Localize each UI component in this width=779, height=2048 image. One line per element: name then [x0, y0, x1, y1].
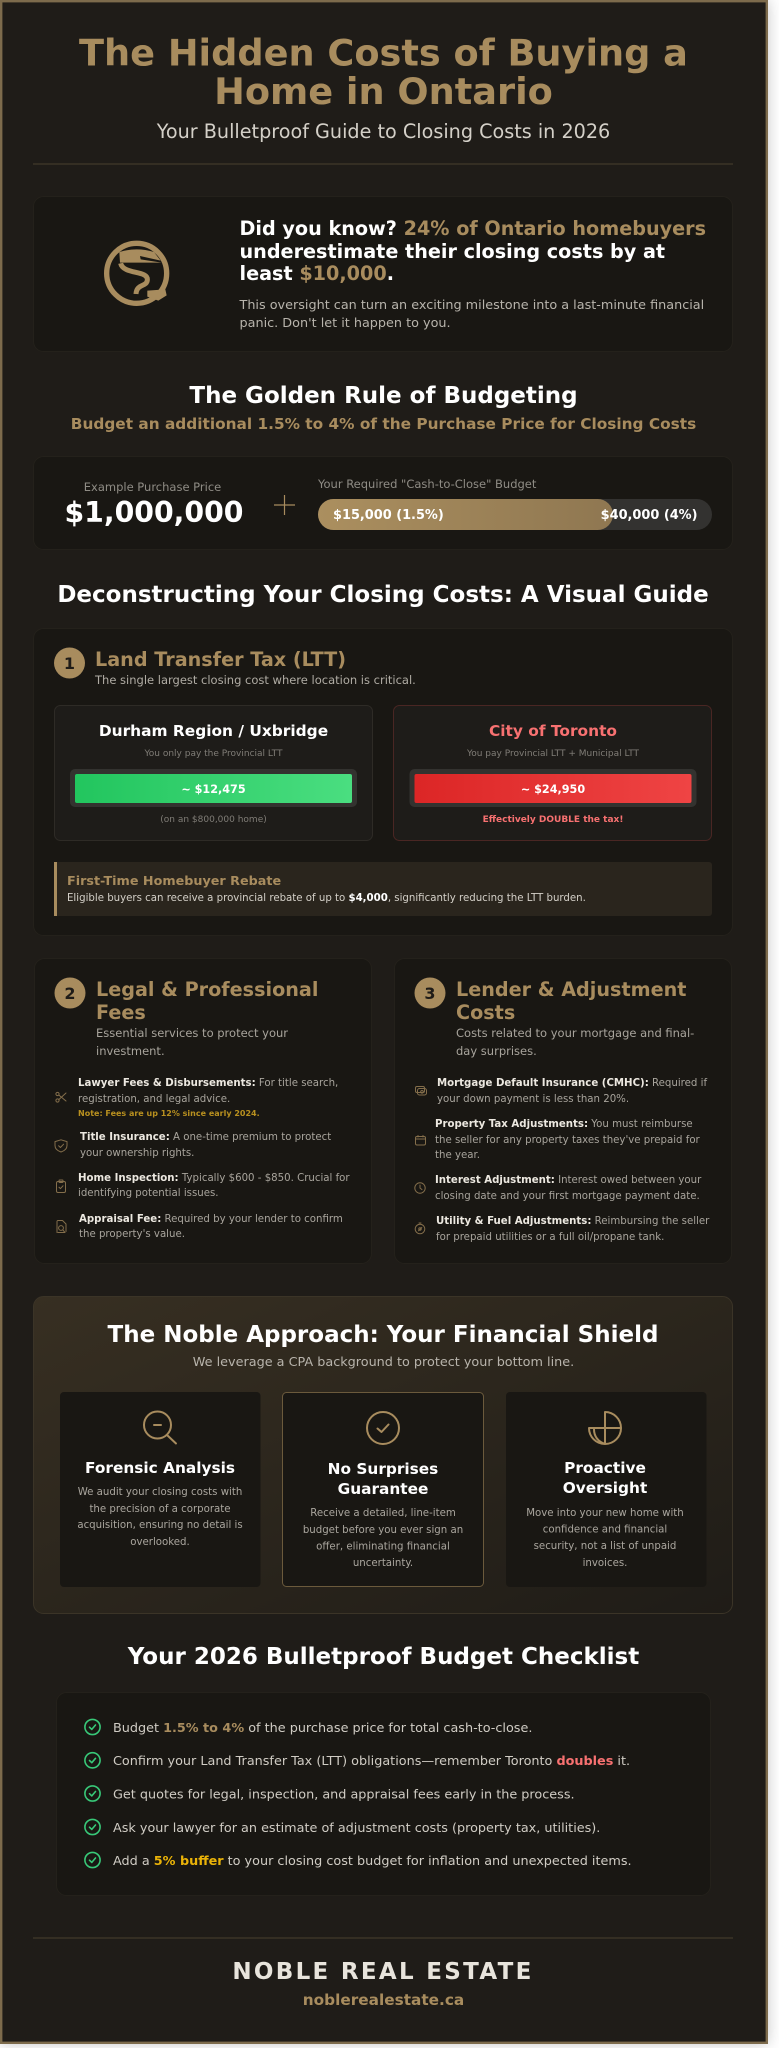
stat headline: Did you know? 24% of Ontario homebuyers	[240, 217, 706, 240]
panel: did you know callout	[34, 196, 732, 352]
badge 3: 3	[424, 984, 436, 1003]
card: proactive oversight: confidence and financial	[543, 1524, 667, 1536]
card: forensic analysis: the precision of a corporate	[89, 1504, 231, 1515]
item: interest adjustment	[435, 1175, 702, 1202]
item: mortgage default insurance	[437, 1078, 707, 1105]
card: Durham	[54, 706, 372, 840]
card: Durham: Durham Region / Uxbridge	[99, 722, 328, 740]
stat headline: underestimate their closing costs by at	[240, 240, 665, 263]
card: no surprises guarantee: uncertainty.	[353, 1558, 413, 1569]
card: forensic analysis: overlooked.	[130, 1537, 190, 1548]
item: lawyer fees: registration, and legal advice.	[78, 1094, 230, 1105]
panel: land transfer tax	[34, 628, 732, 936]
badge 2: 2	[64, 984, 76, 1003]
card: proactive oversight: security, not a list of unpaid	[534, 1541, 676, 1552]
item: appraisal fee: the property's value.	[79, 1229, 185, 1240]
item: utility and fuel	[436, 1216, 710, 1243]
plus sign	[274, 495, 295, 515]
rebate callout: First-Time Homebuyer Rebate	[67, 874, 281, 889]
item: interest adjustment: closing date and your first mortgage payment date.	[435, 1191, 700, 1202]
title: The Hidden Costs of Buying a	[79, 32, 688, 74]
panel: legal and professional fees	[34, 958, 372, 1264]
budget range bar: $40,000 (4%)	[601, 508, 698, 523]
purchase price amount: $1,000,000	[64, 496, 244, 529]
item: home inspection: Home Inspection: Typically $600 - $850. Crucial for	[78, 1173, 350, 1184]
panel: noble approach	[34, 1296, 732, 1614]
footer website: noblerealestate.ca	[303, 1991, 464, 2009]
icon: file search	[57, 1220, 66, 1232]
card: Toronto: ~ $24,950	[521, 783, 585, 796]
icon: magnifier	[144, 1412, 176, 1444]
section title: Fees	[96, 1001, 146, 1024]
item: mortgage default insurance: Mortgage Default Insurance (CMHC): Required if	[437, 1078, 707, 1089]
icon: check circle	[367, 1412, 399, 1444]
title: Home in Ontario	[214, 70, 553, 113]
item: title insurance: your ownership rights.	[80, 1148, 194, 1159]
item: lawyer fees	[78, 1078, 338, 1118]
section description	[96, 1026, 288, 1058]
icon: scissors	[56, 1092, 66, 1102]
rebate callout: Eligible buyers can receive a provincial rebate of up to $4,000, significantly reducing the LTT burden.	[67, 893, 586, 904]
heading: visual guide: Deconstructing Your Closing Costs: A Visual Guide	[57, 582, 709, 608]
card: proactive oversight: Move into your new home with	[526, 1508, 684, 1519]
item: mortgage default insurance: your down payment is less than 20%.	[437, 1094, 629, 1105]
item: utility and fuel: for prepaid utilities or a full oil/propane tank.	[436, 1232, 664, 1243]
card: proactive oversight: Proactive	[564, 1459, 646, 1477]
item: interest adjustment: Interest Adjustment: Interest owed between your	[435, 1175, 702, 1186]
section title	[96, 978, 318, 1024]
item: appraisal fee: Appraisal Fee: Required by your lender to confirm	[79, 1214, 343, 1225]
badge 1: 1	[64, 654, 75, 673]
card: Toronto: Effectively DOUBLE the tax!	[483, 815, 623, 825]
heading: golden rule: The Golden Rule of Budgeting	[189, 383, 578, 409]
stat headline	[240, 217, 706, 285]
icon: shield	[55, 1140, 67, 1152]
card: Toronto	[394, 706, 712, 840]
card: no surprises guarantee: Guarantee	[338, 1480, 428, 1498]
card: forensic analysis: Forensic Analysis	[85, 1459, 235, 1477]
card: no surprises guarantee: Receive a detailed, line-item	[310, 1508, 456, 1519]
card: Durham: (on an $800,000 home)	[160, 815, 267, 825]
callout body: panic. Don't let it happen to you.	[240, 316, 451, 331]
heading: checklist: Your 2026 Bulletproof Budget Checklist	[127, 1644, 639, 1670]
section description: Essential services to protect your	[96, 1026, 288, 1040]
item: lawyer fees: Note: Fees are up 12% since early 2024.	[78, 1109, 260, 1118]
item: appraisal fee	[79, 1214, 343, 1240]
icon: banknotes	[416, 1086, 426, 1095]
item: utility and fuel: Utility & Fuel Adjustments: Reimbursing the seller	[436, 1216, 710, 1227]
card: forensic analysis: We audit your closing costs with	[78, 1487, 242, 1498]
card: Toronto: You pay Provincial LTT + Municipal LTT	[466, 749, 640, 759]
card: proactive oversight: Oversight	[563, 1479, 647, 1497]
item: home inspection: identifying potential issues.	[78, 1188, 219, 1199]
item: lawyer fees: Lawyer Fees & Disbursements: For title search,	[78, 1078, 338, 1089]
section description: day surprises.	[456, 1044, 537, 1058]
card: no surprises guarantee: offer, eliminating financial	[316, 1542, 450, 1552]
card: proactive oversight: invoices.	[583, 1558, 627, 1569]
callout body	[238, 298, 704, 331]
checklist item 1: Budget 1.5% to 4% of the purchase price for total cash-to-close.	[113, 1721, 532, 1736]
card: no surprises guarantee: budget before you ever sign an	[303, 1525, 463, 1536]
card: proactive oversight	[506, 1392, 706, 1587]
stat headline: least $10,000.	[240, 262, 394, 285]
card: forensic analysis	[60, 1392, 260, 1587]
budget label: Your Required "Cash-to-Close" Budget	[317, 477, 537, 491]
section title	[456, 978, 686, 1024]
item: title insurance	[80, 1132, 331, 1159]
checklist item 4: Ask your lawyer for an estimate of adjustment costs (property tax, utilities).	[113, 1821, 600, 1836]
section description: The single largest closing cost where location is critical.	[94, 673, 416, 687]
icon: globe with dollar swirl	[107, 243, 167, 303]
footer brand: NOBLE REAL ESTATE	[232, 1959, 534, 1985]
badge 1	[54, 648, 85, 678]
icon: clipboard	[56, 1180, 66, 1192]
item: title insurance: Title Insurance: A one-time premium to protect	[80, 1132, 331, 1143]
item: property tax adjustments: Property Tax Adjustments: You must reimburse	[435, 1119, 693, 1130]
icon: clock	[415, 1183, 425, 1193]
checklist item 5: Add a 5% buffer to your closing cost budget for inflation and unexpected items.	[113, 1854, 632, 1869]
section title: Land Transfer Tax (LTT)	[95, 648, 346, 671]
checklist item 2: Confirm your Land Transfer Tax (LTT) obligations—remember Toronto doubles it.	[113, 1754, 630, 1769]
rebate callout	[54, 862, 712, 916]
item: property tax adjustments: the seller for any property taxes they've prepaid for	[435, 1135, 701, 1146]
callout body: This oversight can turn an exciting milestone into a last-minute financial	[238, 298, 704, 313]
section description: investment.	[96, 1044, 165, 1058]
panel: cash to close	[34, 456, 732, 550]
golden rule subheading: Budget an additional 1.5% to 4% of the Purchase Price for Closing Costs	[71, 415, 696, 433]
card: no surprises guarantee: No Surprises	[328, 1460, 438, 1478]
panel heading: The Noble Approach: Your Financial Shield	[108, 1322, 658, 1348]
card: Durham: ~ $12,475	[181, 783, 246, 796]
item: home inspection	[78, 1173, 350, 1199]
budget range bar: $15,000 (1.5%)	[333, 508, 444, 523]
panel: lender and adjustment costs	[394, 958, 732, 1264]
purchase price label: Example Purchase Price	[84, 480, 221, 494]
badge 2	[54, 978, 86, 1008]
item: property tax adjustments: the year.	[435, 1150, 480, 1161]
icon: pie shield	[589, 1412, 621, 1444]
card: forensic analysis: acquisition, ensuring no detail is	[77, 1520, 243, 1531]
panel subheading: We leverage a CPA background to protect your bottom line.	[193, 1355, 574, 1370]
badge 3	[414, 978, 446, 1008]
section description	[456, 1026, 694, 1058]
card: no surprises guarantee	[282, 1392, 484, 1586]
card: Toronto: City of Toronto	[489, 722, 617, 740]
section title: Lender & Adjustment	[456, 978, 686, 1001]
section title: Legal & Professional	[96, 978, 318, 1001]
icon: utility gauge	[415, 1223, 425, 1234]
budget range bar	[318, 499, 712, 530]
icon: calendar	[416, 1136, 426, 1145]
panel: checklist	[56, 1692, 710, 1896]
section description: Costs related to your mortgage and final-	[456, 1026, 694, 1040]
section title: Costs	[456, 1001, 515, 1024]
title	[79, 32, 688, 113]
item: property tax adjustments	[435, 1119, 701, 1161]
subtitle: Your Bulletproof Guide to Closing Costs in 2026	[156, 120, 610, 143]
card: Durham: You only pay the Provincial LTT	[143, 749, 283, 759]
checklist item 3: Get quotes for legal, inspection, and appraisal fees early in the process.	[113, 1788, 575, 1802]
